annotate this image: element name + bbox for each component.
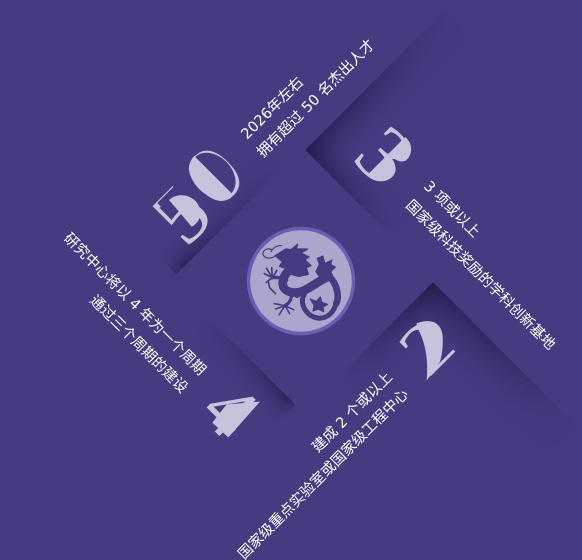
text: 50 talents: 2026年左右 (238, 74, 307, 143)
text: 50 talents: 拥有超过 50 名杰出人才 (254, 36, 378, 161)
text: 3 awards: 国家级科技奖励的学科创新基地 (402, 197, 559, 354)
fold shadows (169, 38, 548, 412)
dragon badge (248, 228, 354, 334)
numeral: 3: 3 (338, 109, 429, 200)
text: 2 labs: 国家级重点实验室或国家级工程中心 (235, 385, 412, 560)
text: 2 labs: 建成 2 个或以上 (309, 369, 396, 456)
numeral: 2: 2 (383, 303, 470, 390)
numeral: 50 (135, 127, 262, 262)
numeral: 50: 0 (165, 127, 262, 224)
numeral: 50: 5 (135, 168, 229, 262)
dragon emblem (263, 244, 338, 318)
text: 4 year cycle: 通过三个周期的建设 (86, 292, 191, 397)
text: 4 year cycle: 研究中心将以 4 年为一个周期 (60, 230, 209, 379)
text: 3 awards: 3 项或以上 (420, 178, 483, 241)
numeral: 4: 4 (186, 365, 275, 454)
